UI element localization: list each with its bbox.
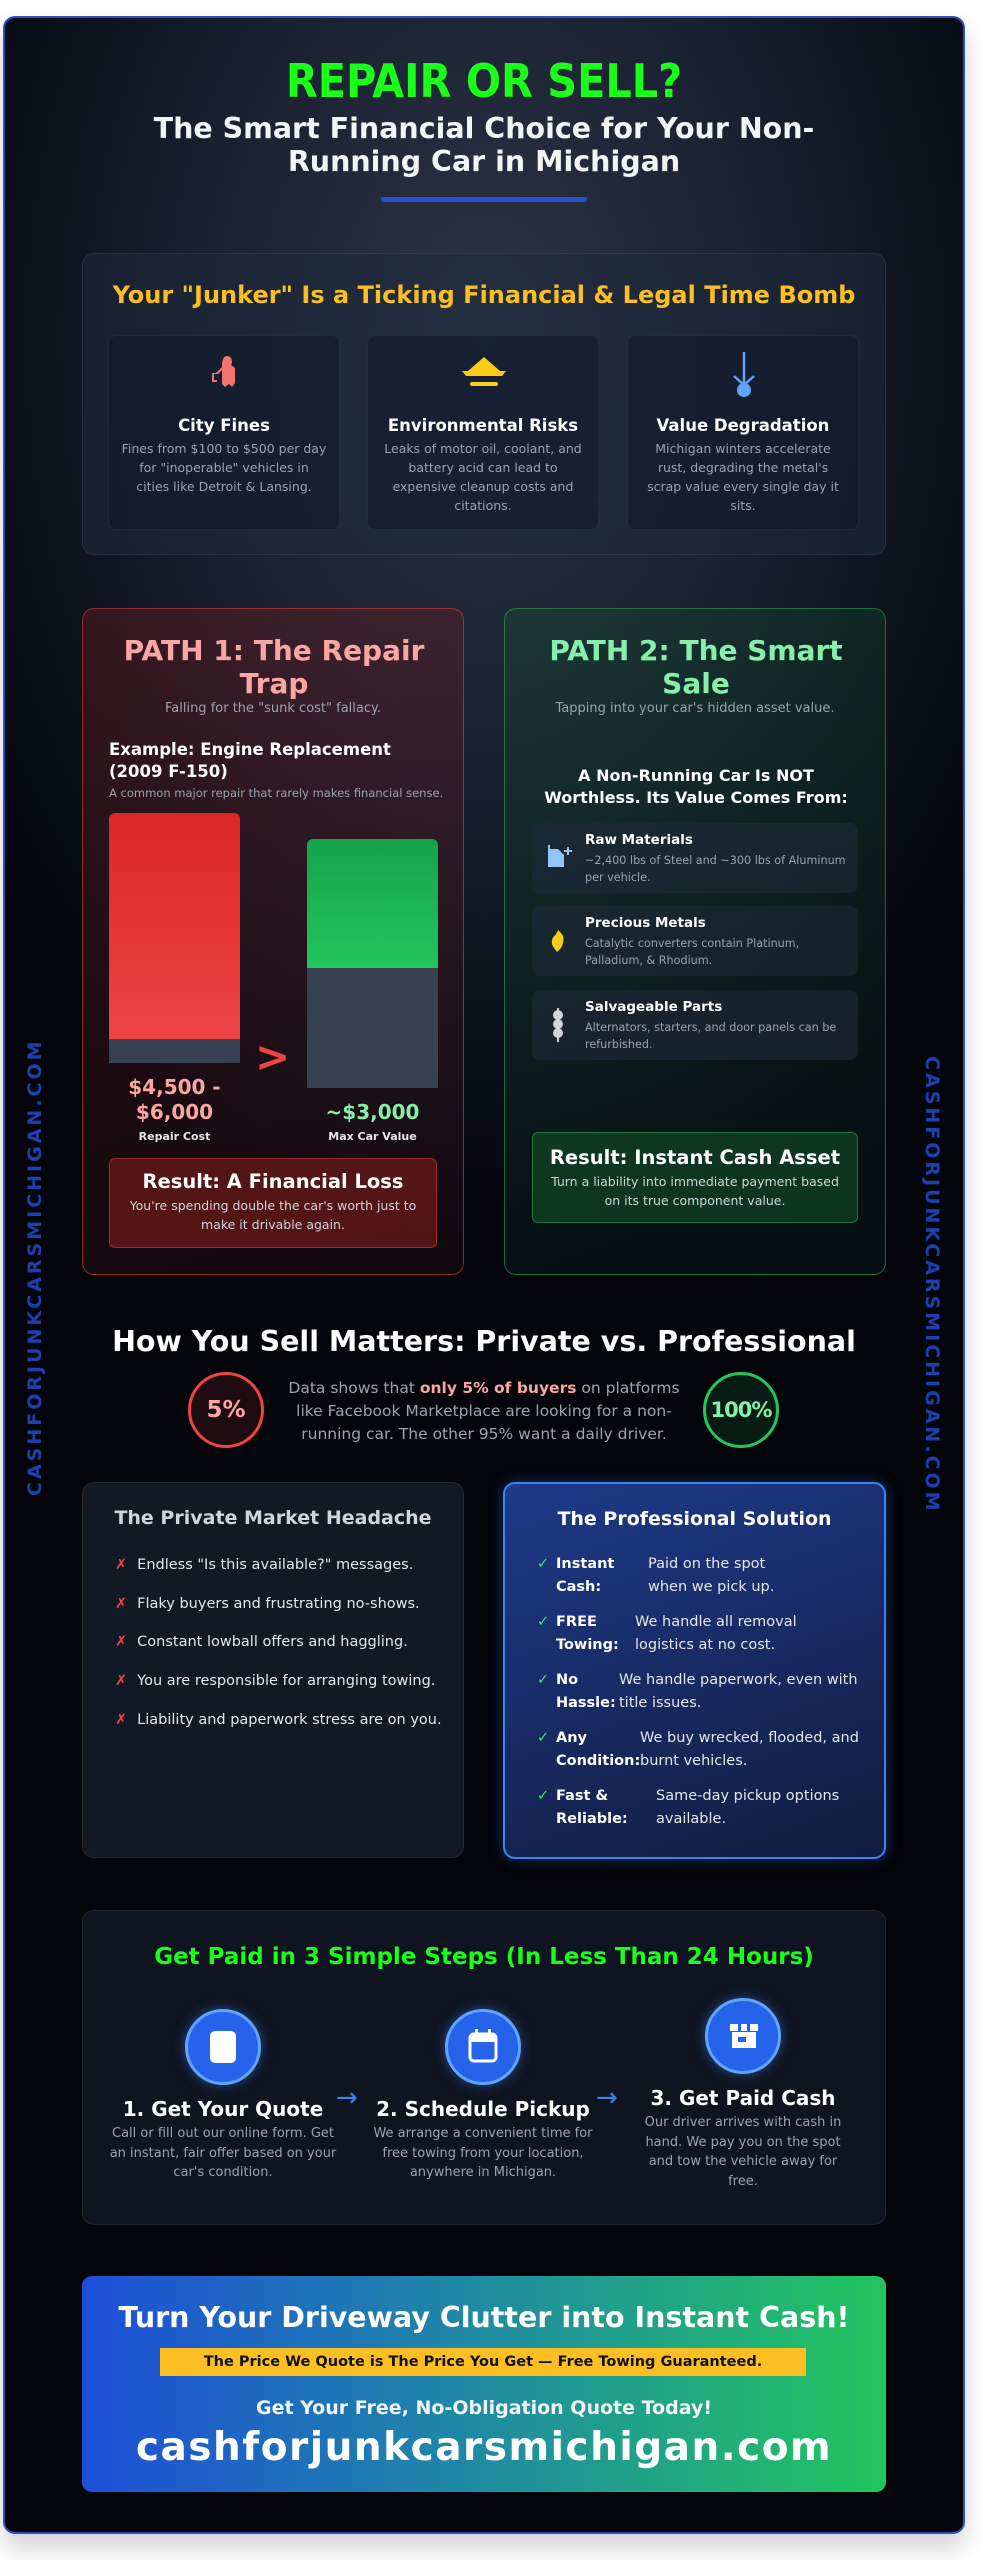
icon: city fines [212, 356, 235, 387]
text: FREE Towing: [556, 1614, 619, 1653]
website: cashforjunkcarsmichigan.com [136, 2425, 832, 2470]
panel: path 1 repair trap [82, 608, 464, 1275]
panel: 3 steps [82, 1910, 886, 2225]
item: raw materials: ~2,400 lbs of Steel and ~300 lbs of Aluminum per vehicle. [585, 854, 846, 884]
card: environmental [367, 335, 599, 530]
card: value degradation: Michigan winters accelerate rust, degrading the metal's scrap value every single day it sits. [647, 441, 839, 513]
heading: time bomb: Your "Junker" Is a Ticking Financial & Legal Time Bomb [113, 281, 855, 309]
text: We arrange a convenient time for free towing from your location, anywhere in Michigan. [373, 2126, 593, 2180]
arrow 1: → [336, 2083, 358, 2113]
card: city fines: City Fines [178, 416, 270, 435]
stat paragraph: Data shows that only 5% of buyers on platforms like Facebook Marketplace are looking for a non-running car. The other 95% want a daily driver. [288, 1379, 680, 1443]
steps heading: Get Paid in 3 Simple Steps (In Less Than 24 Hours) [154, 1944, 814, 1970]
text: ✗ You are responsible for arranging towing. [115, 1673, 435, 1689]
side text right: CASHFORJUNKCARSMICHIGAN.COM [921, 1056, 943, 1514]
greater-than sign: > [255, 1032, 290, 1081]
label: repair cost: $4,500 - [128, 1075, 221, 1099]
item: salvageable parts: Salvageable Parts [585, 999, 722, 1015]
text: Our driver arrives with cash in hand. We pay you on the spot and tow the vehicle away for free. [645, 2115, 841, 2188]
item: precious metals: Catalytic converters contain Platinum, Palladium, & Rhodium. [585, 937, 799, 967]
list: private cons [115, 1557, 442, 1728]
stat circle 5%: 5% [206, 1397, 246, 1423]
value heading: A Non-Running Car Is NOT Worthless. Its Value Comes From: [544, 766, 848, 807]
icon: precious metals [552, 930, 564, 952]
result: instant cash asset: Turn a liability into immediate payment based on its true component value. [551, 1174, 839, 1208]
icon: cash [705, 1998, 781, 2074]
icon: hazard [462, 357, 506, 386]
card: environmental: Leaks of motor oil, coolant, and battery acid can lead to expensive cleanup costs and citations. [384, 441, 582, 513]
panel: path 2 smart sale [504, 608, 886, 1275]
text: We handle paperwork, even with title issues. [619, 1672, 858, 1711]
label: car value: ~$3,000 [326, 1100, 419, 1124]
text: ✓ [537, 1672, 549, 1688]
card: value degradation: Value Degradation [657, 416, 829, 435]
step 3 [645, 1990, 841, 2188]
step 2 [373, 2002, 593, 2180]
path 2 subtitle: Tapping into your car's hidden asset value. [556, 701, 834, 716]
text: Fast & Reliable: [556, 1788, 628, 1827]
card: value degradation [627, 335, 859, 530]
CTA headline: Turn Your Driveway Clutter into Instant Cash! [119, 2301, 849, 2334]
subtitle: The Smart Financial Choice for Your Non-Running Car in Michigan [154, 112, 814, 178]
text: ✓ [537, 1788, 549, 1804]
stat circle 100% [703, 1372, 779, 1448]
text: ✗ Constant lowball offers and haggling. [115, 1634, 408, 1650]
text: Call or fill out our online form. Get an instant, fair offer based on your car's condition. [110, 2126, 336, 2180]
stat circle 5% [188, 1372, 264, 1448]
item: precious metals: Precious Metals [585, 915, 706, 931]
list: professional pros [537, 1556, 859, 1827]
private heading: The Private Market Headache [114, 1507, 432, 1529]
card: environmental: Environmental Risks [388, 416, 578, 435]
text: 1. Get Your Quote [123, 2097, 323, 2121]
text: ✓ [537, 1730, 549, 1746]
side text left: CASHFORJUNKCARSMICHIGAN.COM [24, 1038, 46, 1496]
bar: max car value [307, 839, 438, 1088]
label: repair cost [128, 1075, 221, 1124]
panel: professional solution [503, 1482, 886, 1859]
text: Same-day pickup options available. [656, 1788, 839, 1827]
bar chart: repair cost vs value: Repair Cost [139, 1130, 210, 1143]
text: 3. Get Paid Cash [650, 2086, 836, 2110]
stat circle 100%: 100% [711, 1398, 771, 1422]
example heading: Example: Engine Replacement (2009 F-150) [109, 740, 391, 781]
item: raw materials [532, 823, 858, 893]
item: precious metals [532, 906, 858, 976]
panel: time bomb [82, 253, 886, 555]
title: REPAIR OR SELL? [286, 54, 682, 108]
icon: calendar [445, 2009, 521, 2085]
guarantee strip [160, 2348, 806, 2376]
item: salvageable parts: Alternators, starters, and door panels can be refurbished. [585, 1021, 836, 1051]
card: city fines: Fines from $100 to $500 per day for "inoperable" vehicles in cities like Detroit & Lansing. [122, 441, 326, 494]
heading: how you sell matters: How You Sell Matters: Private vs. Professional [112, 1325, 856, 1358]
bar chart: repair cost vs value [109, 813, 438, 1143]
icon: raw materials [548, 845, 572, 867]
bar: repair cost [109, 813, 240, 1063]
example note: A common major repair that rarely makes financial sense. [109, 786, 443, 800]
text: We handle all removal logistics at no cost. [635, 1614, 797, 1653]
result: financial loss [109, 1158, 437, 1248]
text: No Hassle: [556, 1672, 616, 1711]
text: Any Condition: [556, 1730, 640, 1769]
text: ✗ Flaky buyers and frustrating no-shows. [115, 1596, 420, 1612]
text: Paid on the spot when we pick up. [648, 1556, 774, 1595]
card: city fines [108, 335, 340, 530]
CTA banner [82, 2276, 886, 2492]
step 1 [110, 2002, 336, 2180]
text: 2. Schedule Pickup [376, 2097, 590, 2121]
path 2 title: PATH 2: The Smart Sale [549, 634, 843, 700]
guarantee strip: The Price We Quote is The Price You Get — Free Towing Guaranteed. [204, 2354, 762, 2370]
text: ✗ Liability and paperwork stress are on you. [115, 1712, 442, 1728]
text: We buy wrecked, flooded, and burnt vehicles. [640, 1730, 859, 1769]
icon: parts [553, 1008, 563, 1042]
icon: down arrow [733, 352, 755, 397]
text: ✓ [537, 1556, 549, 1572]
text: Instant Cash: [556, 1556, 614, 1595]
path 1 subtitle: Falling for the "sunk cost" fallacy. [165, 701, 381, 716]
text: ✓ [537, 1614, 549, 1630]
bar chart: repair cost vs value: Max Car Value [328, 1130, 417, 1143]
arrow 2: → [596, 2083, 618, 2113]
CTA subline: Get Your Free, No-Obligation Quote Today! [256, 2397, 712, 2419]
result: financial loss: Result: A Financial Loss [142, 1170, 404, 1193]
label: repair cost: $6,000 [136, 1100, 213, 1124]
title underline [381, 197, 587, 202]
result: financial loss: You're spending double the car's worth just to make it drivable again. [130, 1198, 416, 1232]
panel: private market [82, 1482, 464, 1858]
icon: quote [185, 2009, 261, 2085]
text: ✗ Endless "Is this available?" messages. [115, 1557, 413, 1573]
item: salvageable parts [532, 990, 858, 1060]
path 1 title: PATH 1: The Repair Trap [124, 634, 424, 700]
result: instant cash asset: Result: Instant Cash Asset [550, 1146, 840, 1169]
professional heading: The Professional Solution [557, 1508, 832, 1530]
item: raw materials: Raw Materials [585, 832, 693, 848]
result: instant cash asset [532, 1132, 858, 1223]
